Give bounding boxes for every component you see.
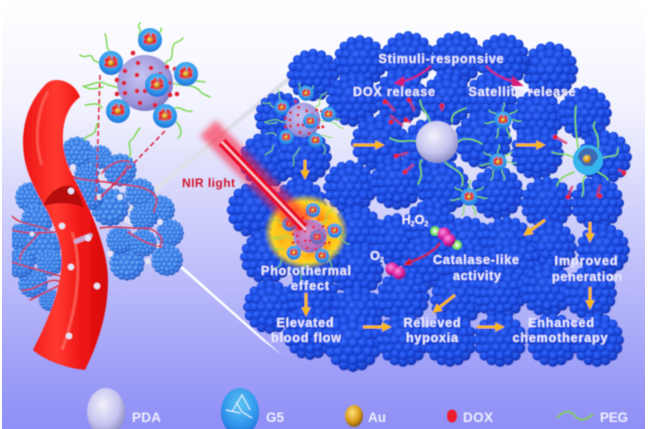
legend: PEG [557, 410, 628, 425]
legend: PDA [87, 388, 161, 429]
labels: peneration [552, 270, 622, 284]
labels: Relieved [404, 316, 460, 330]
DOX dots [383, 98, 626, 199]
labels: O [415, 213, 425, 227]
dashed zoom lines [96, 75, 165, 200]
labels: Stimuli-responsive [378, 52, 504, 66]
drug-carrier dots in tissue [30, 164, 163, 264]
labels: Catalase-like [433, 253, 519, 267]
pink arrows from stimuli heading [396, 66, 521, 85]
legend: G5: G5 [266, 410, 284, 425]
G5 sphere with PEG at tumor interior [552, 106, 618, 196]
legend: DOX: DOX [463, 410, 493, 425]
left tumor cluster [5, 136, 184, 311]
released DOX drug molecules [385, 99, 624, 197]
NIR light label: NIR light [182, 176, 235, 190]
legend: Au [345, 405, 386, 427]
legend: PDA: PDA [132, 410, 161, 425]
blood capillaries [12, 161, 162, 300]
labels: H [402, 213, 411, 227]
assembly: photothermal heated [271, 200, 349, 280]
legend: PEG: PEG [600, 410, 628, 425]
nanoparticle assembly: large detail [80, 23, 210, 157]
labels: O [370, 249, 380, 263]
flow arrows [305, 145, 590, 327]
labels: Improved [554, 254, 618, 268]
legend: DOX [447, 410, 493, 425]
released satellite nanoparticles [451, 103, 521, 215]
labels: Enhanced [528, 316, 594, 330]
labels: 2 [411, 221, 415, 228]
labels [261, 52, 622, 345]
panel: tumor tissue magnified nanoparticle spheres [227, 31, 632, 372]
central PDA sphere with PEG chains [390, 100, 482, 186]
photothermal blaze [264, 194, 348, 270]
light beam wedge from tumor to magnified panel [122, 70, 298, 355]
legend [87, 388, 628, 429]
labels: 2 [380, 257, 384, 264]
labels: activity [453, 269, 501, 283]
main illustration [5, 23, 632, 372]
labels: hypoxia [406, 331, 459, 345]
labels: Elevated [276, 316, 334, 330]
labels: chemotherapy [512, 331, 608, 345]
labels: DOX release [353, 85, 435, 99]
labels: Photothermal [261, 264, 351, 278]
assembly: top of cascade [263, 83, 343, 166]
legend: G5 [221, 388, 284, 429]
labels: blood flow [271, 331, 341, 345]
labels: 2 [424, 221, 428, 228]
labels: effect [291, 279, 330, 293]
catalase reaction molecules [386, 226, 462, 280]
blood vessel [23, 80, 108, 370]
labels: Satellite release [468, 85, 576, 99]
legend: Au: Au [368, 410, 386, 425]
NIR light beam [208, 128, 306, 230]
